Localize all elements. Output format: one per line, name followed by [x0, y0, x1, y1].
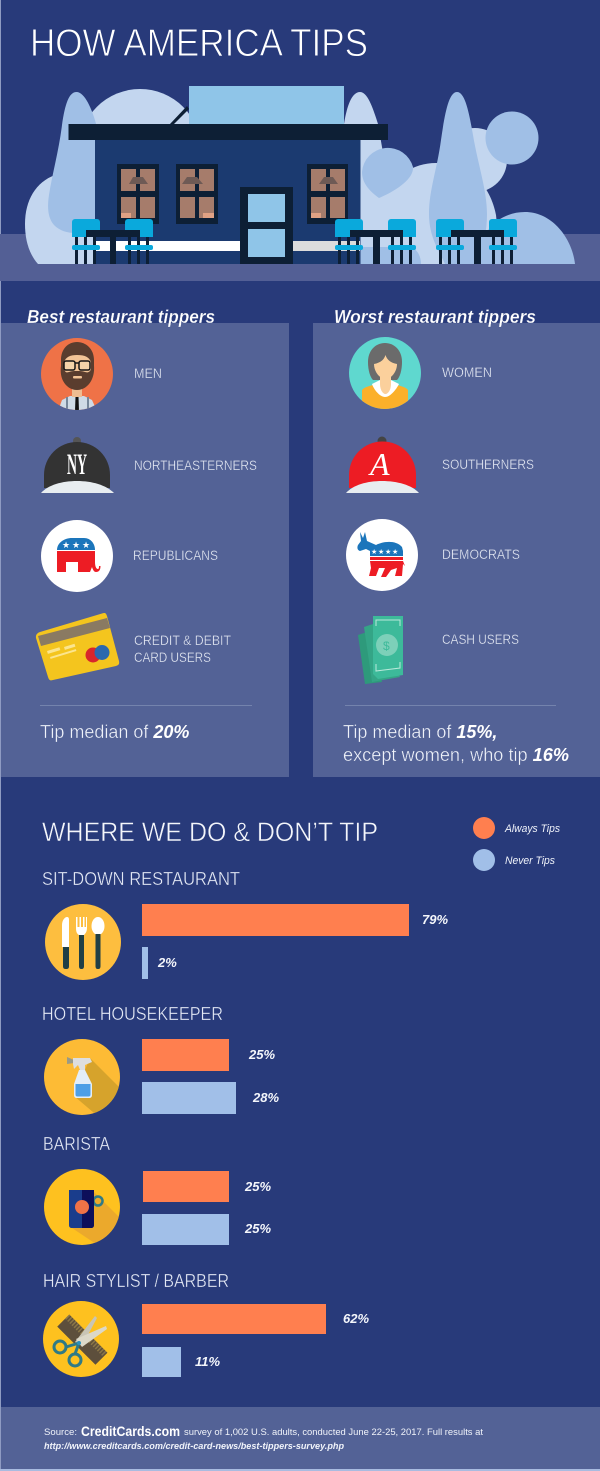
label: southerners: SOUTHERNERS [442, 456, 534, 472]
label: men: MEN [134, 365, 162, 381]
text: tip median 15% and 16%: except women, who tip 16% [343, 745, 569, 765]
legend [473, 817, 560, 871]
chart row: hair stylist or barber [43, 1271, 369, 1377]
label: republicans: REPUBLICANS [133, 547, 218, 563]
icon: cash [358, 616, 403, 684]
chart row: barista: 25% [244, 1221, 271, 1236]
icon: democrat donkey: ★ [392, 548, 398, 556]
background trees and bushes [25, 89, 575, 264]
icon: cutlery [45, 904, 121, 980]
chart row: hair stylist or barber: 62% [343, 1311, 369, 1326]
chart row: sit-down restaurant [42, 869, 448, 980]
icon: braves cap [346, 436, 419, 493]
label: northeasterners: NORTHEASTERNERS [134, 457, 257, 473]
label: credit and debit card users [134, 632, 231, 665]
icon: republican elephant: ★ [72, 540, 80, 550]
label: democrats: DEMOCRATS [442, 546, 520, 562]
patio tables and chairs [72, 219, 517, 264]
chart row: sit-down restaurant: 2% [157, 955, 177, 970]
chart row: hotel housekeeper: 28% [252, 1090, 279, 1105]
legend: Always Tips [504, 823, 560, 835]
text: tip median 20%: Tip median of 20% [40, 722, 189, 742]
chart row: sit-down restaurant: 79% [422, 912, 448, 927]
icon: cash: $ [383, 639, 390, 653]
footer source: Source: [44, 1427, 77, 1438]
icon: democrat donkey [346, 519, 418, 591]
icon: democrat donkey: ★ [385, 548, 391, 556]
icon: republican elephant [41, 520, 113, 592]
chart row: barista [43, 1134, 271, 1248]
building [68, 124, 388, 264]
footer source: CreditCards.com [81, 1424, 180, 1439]
icon: credit card [36, 613, 119, 680]
heading: worst tippers: Worst restaurant tippers [334, 307, 536, 327]
door [240, 187, 293, 264]
panel: worst restaurant tippers [313, 307, 600, 777]
sign [170, 86, 344, 124]
restaurant illustration [0, 86, 600, 281]
chart row: barista: 25% [244, 1179, 271, 1194]
title: HOW AMERICA TIPS [30, 22, 368, 65]
icon: republican elephant: ★ [62, 540, 70, 550]
footer source: survey of 1,002 U.S. adults, conducted June 22-25, 2017. Full results at [184, 1427, 483, 1438]
chart row: barista: BARISTA [43, 1134, 110, 1154]
windows [117, 164, 348, 224]
chart row: sit-down restaurant: SIT-DOWN RESTAURANT [42, 869, 240, 889]
text: tip median 15% and 16% [343, 722, 569, 765]
label: credit and debit card users: CREDIT & DEBIT [134, 632, 231, 648]
text: tip median 15% and 16%: Tip median of 15%, [343, 722, 497, 742]
icon: comb and scissors [43, 1301, 119, 1377]
icon: yankees cap: NY [67, 448, 87, 481]
label: credit and debit card users: CARD USERS [134, 649, 211, 665]
icon: man [41, 338, 113, 411]
label: women: WOMEN [442, 364, 492, 380]
footer source: http://www.creditcards.com/credit-card-news/best-tippers-survey.php [44, 1441, 344, 1452]
icon: republican elephant: ★ [82, 540, 90, 550]
chart row: hotel housekeeper: HOTEL HOUSEKEEPER [42, 1004, 223, 1024]
chart row: hotel housekeeper: 25% [248, 1047, 275, 1062]
icon: braves cap: A [368, 446, 390, 482]
footer source [0, 1407, 600, 1471]
panel: best restaurant tippers [1, 307, 289, 777]
icon: coffee mug [44, 1169, 122, 1248]
icon: spray bottle [44, 1039, 122, 1118]
chart row: hotel housekeeper [42, 1004, 279, 1118]
icon: democrat donkey: ★ [371, 548, 377, 556]
label: cash users: CASH USERS [442, 631, 519, 647]
chart row: hair stylist or barber: HAIR STYLIST / BARBER [43, 1271, 229, 1291]
heading: best tippers: Best restaurant tippers [27, 307, 215, 327]
icon: democrat donkey: ★ [378, 548, 384, 556]
chart row: hair stylist or barber: 11% [195, 1354, 220, 1369]
icon: yankees cap [41, 437, 114, 493]
icon: woman [349, 337, 421, 410]
heading: where we do and don't tip: WHERE WE DO & DON’T TIP [42, 817, 378, 847]
legend: Never Tips [505, 855, 555, 867]
